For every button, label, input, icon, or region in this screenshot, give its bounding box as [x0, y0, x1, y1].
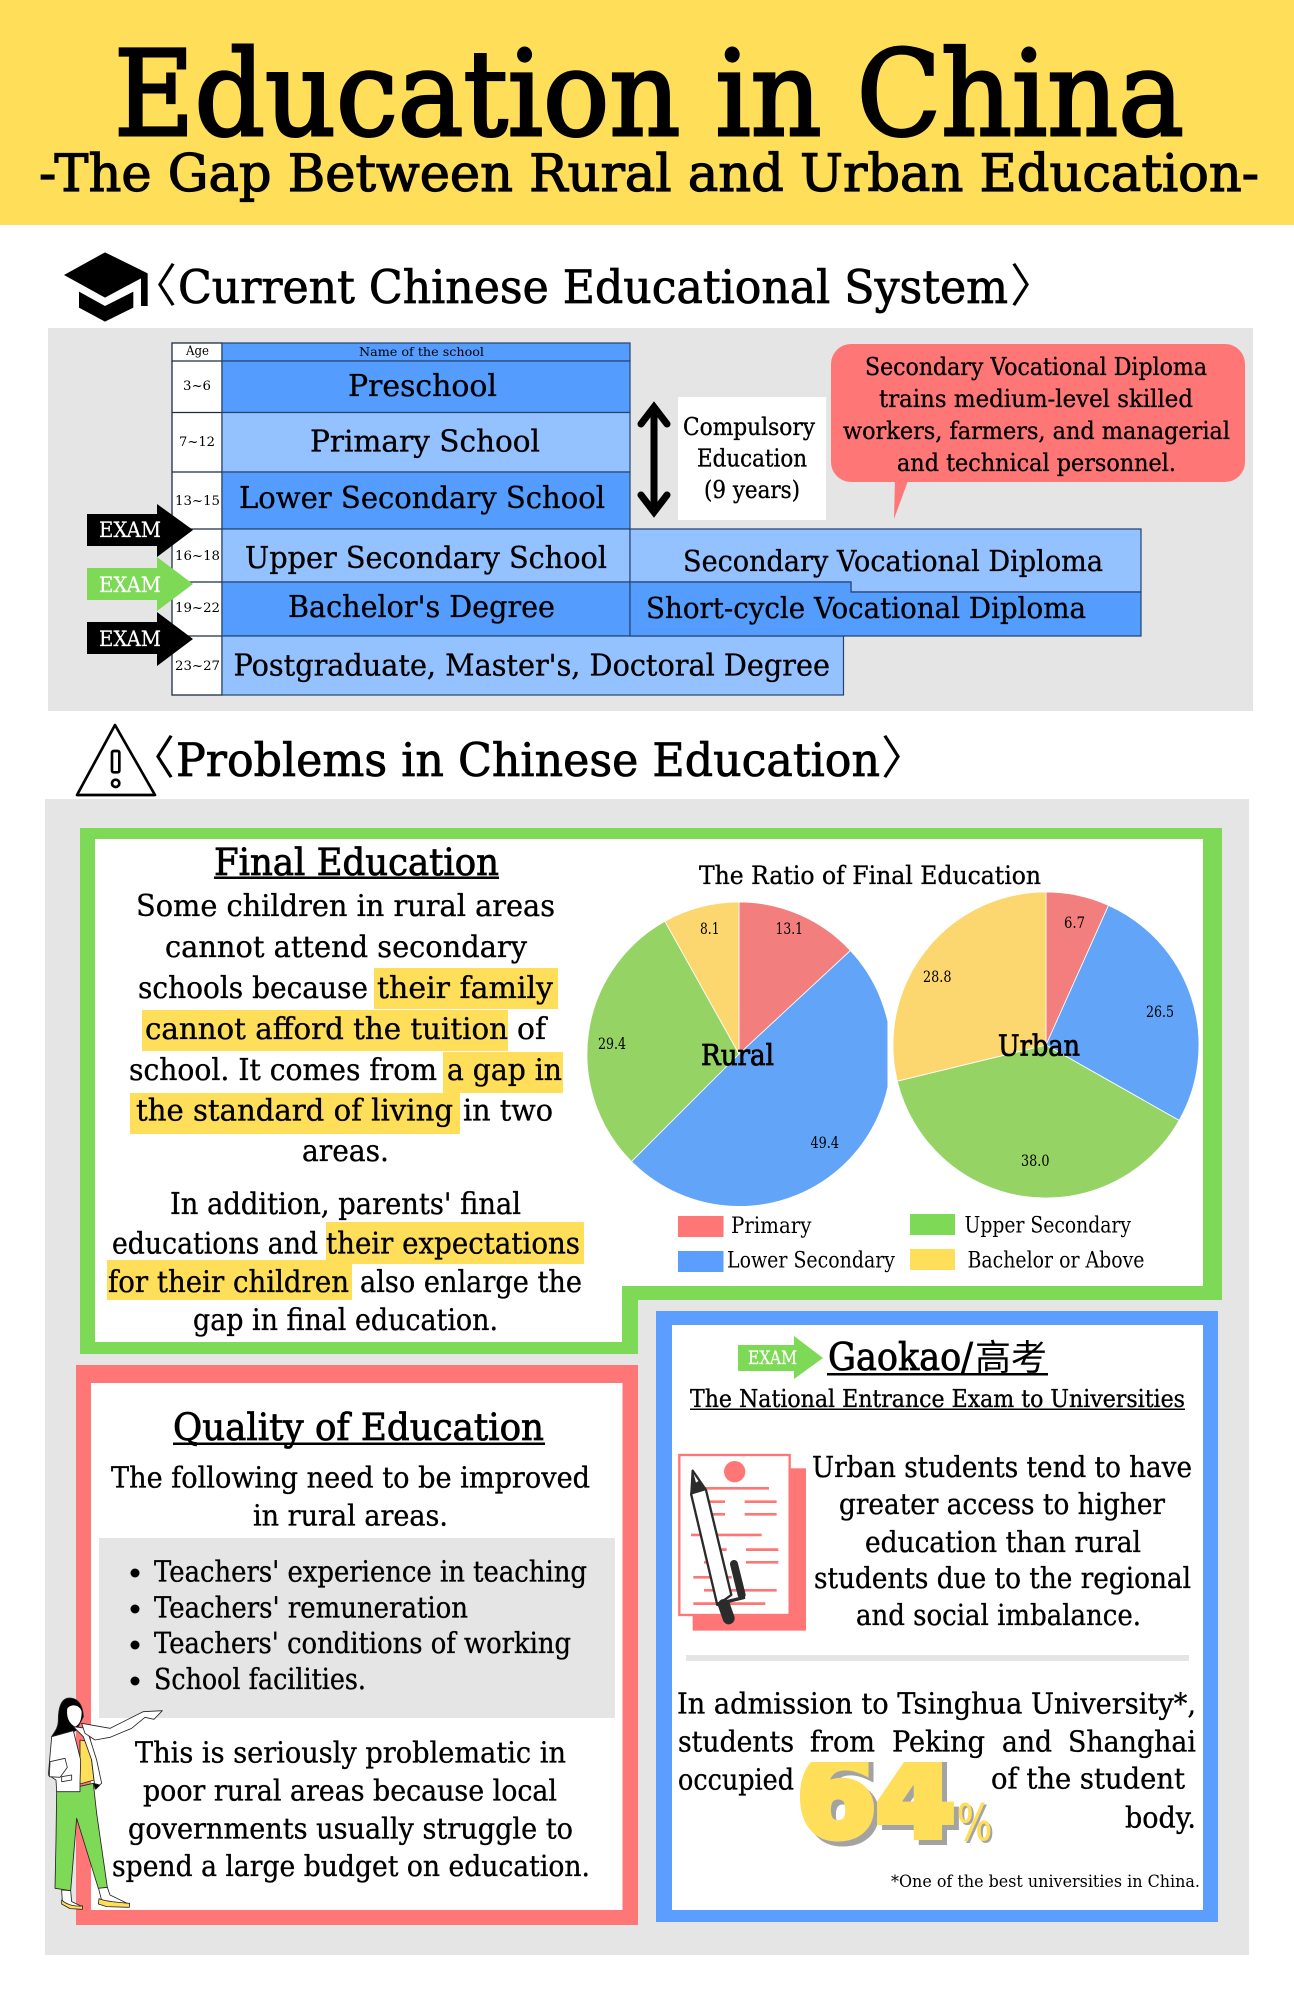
callout: vocational diploma: trains medium-level skilled — [879, 384, 1193, 413]
legend: Upper Secondary — [964, 1214, 1131, 1238]
heading: problems: 〈 — [129, 732, 175, 784]
heading: current system: Current Chinese Educational System — [178, 260, 1008, 314]
icon: warning triangle — [77, 725, 155, 795]
text: final education body: a gap in — [447, 1053, 562, 1088]
panel: gaokao — [656, 1311, 1218, 1922]
text: conclusion — [112, 1736, 590, 1883]
heading: quality of education: Quality of Education — [173, 1406, 544, 1449]
list box: School facilities. — [154, 1662, 366, 1696]
title: Education in China — [114, 25, 1184, 163]
table: age column: 16~18 — [175, 549, 220, 564]
text: conclusion: spend a large budget on education. — [112, 1849, 590, 1883]
table: school names: Lower Secondary School — [239, 481, 605, 516]
stat: 64 percent: 64 — [802, 1738, 960, 1868]
icon: exam paper and pencil — [679, 1455, 806, 1631]
text: final education body: the standard of living — [136, 1094, 453, 1128]
compulsory education label: Compulsory — [683, 413, 815, 441]
text: final education body: areas. — [302, 1134, 389, 1169]
list box — [99, 1538, 615, 1718]
callout: vocational diploma: Secondary Vocational Diploma — [865, 352, 1207, 381]
exam arrow: gaokao: EXAM — [748, 1347, 797, 1369]
panel: problems background — [45, 799, 1249, 1955]
list box: Teachers' remuneration — [154, 1590, 468, 1624]
pie chart: urban: Urban — [998, 1029, 1080, 1063]
panel: educational system — [48, 328, 1253, 711]
pie chart: rural — [587, 902, 891, 1206]
text: tsinghua admission: In admission to Tsinghua University*, — [677, 1686, 1196, 1720]
table: age column: 23~27 — [175, 659, 220, 674]
text: final education body: their family — [377, 971, 553, 1006]
pie chart: urban — [893, 892, 1199, 1198]
icon: graduation cap — [64, 252, 148, 322]
text: final education body: school. It comes from — [129, 1053, 437, 1088]
heading: problems: Problems in Chinese Education — [176, 733, 880, 787]
exam arrow: black 1 — [87, 504, 193, 557]
footnote: *One of the best universities in China. — [891, 1872, 1200, 1892]
heading: problems: 〉 — [881, 732, 927, 784]
callout: vocational diploma — [831, 344, 1245, 519]
exam arrow: gaokao — [738, 1336, 823, 1379]
text: final education body — [108, 889, 582, 1338]
table: age column: 7~12 — [179, 435, 215, 450]
text: final education body: Some children in rural areas — [136, 889, 555, 924]
compulsory education label: Education — [697, 444, 807, 472]
text: urban access — [812, 1450, 1192, 1632]
exam arrow: black 1: EXAM — [99, 518, 161, 542]
table: school names: Postgraduate, Master's, Doctoral Degree — [234, 648, 830, 684]
exam arrow: green — [87, 557, 193, 611]
heading: current system: 〉 — [1010, 260, 1056, 312]
text: final education body: cannot attend secondary — [165, 930, 527, 965]
text: intro: in rural areas. — [253, 1498, 448, 1532]
pie chart: rural: 13.1 — [776, 919, 803, 938]
pie chart: rural: 29.4 — [598, 1034, 626, 1053]
table: school names: Primary School — [310, 424, 540, 460]
text: urban access: greater access to higher — [839, 1487, 1165, 1521]
table: school names — [234, 344, 1103, 684]
text: final education body: educations and — [112, 1226, 318, 1262]
panel: final education — [80, 828, 1222, 1354]
text: final education body: in two — [463, 1094, 553, 1128]
stat: 64 percent: % — [959, 1796, 994, 1854]
table: school names: Preschool — [348, 369, 497, 404]
exam arrow: black 2: EXAM — [99, 627, 161, 651]
table: age column: 19~22 — [175, 601, 220, 616]
table: school names: Name of the school — [359, 344, 484, 359]
table: school names: Secondary Vocational Diploma — [683, 544, 1103, 578]
table: school names: Short-cycle Vocational Diploma — [646, 591, 1086, 625]
pie chart: urban: 26.5 — [1146, 1002, 1174, 1021]
heading: current system: 〈 — [131, 260, 177, 312]
chart title: The Ratio of Final Education — [699, 861, 1041, 890]
table: school rows — [222, 343, 1141, 695]
compulsory education label: (9 years) — [704, 476, 800, 504]
callout: vocational diploma: workers, farmers, and managerial — [843, 416, 1230, 445]
text: final education body: of — [517, 1012, 548, 1047]
table: age column — [172, 343, 222, 695]
table: school names: Bachelor's Degree — [288, 590, 555, 625]
text: conclusion: This is seriously problematic in — [135, 1736, 566, 1770]
table: age column: 13~15 — [175, 494, 220, 509]
text: conclusion: governments usually struggle to — [128, 1812, 573, 1846]
text: intro: The following need to be improved — [111, 1460, 590, 1494]
pie chart: rural: Rural — [701, 1038, 774, 1072]
text: final education body: schools because — [138, 971, 368, 1006]
legend: Primary — [731, 1214, 812, 1239]
pie chart: urban: 6.7 — [1064, 913, 1085, 932]
text: final education body: also enlarge the — [360, 1265, 582, 1300]
table: age column: 3~6 — [183, 379, 211, 394]
text: tsinghua admission: occupied — [678, 1762, 794, 1796]
panel: quality of education — [76, 1365, 638, 1925]
text: tsinghua admission: body. — [1125, 1800, 1196, 1834]
text: tsinghua admission: Peking — [892, 1724, 985, 1758]
legend: Bachelor or Above — [968, 1248, 1144, 1274]
table: age column: Age — [185, 344, 209, 359]
header banner — [0, 0, 1294, 225]
list box: Teachers' conditions of working — [154, 1626, 571, 1660]
arrow: compulsory range — [641, 407, 667, 512]
legend: Lower Secondary — [727, 1248, 895, 1274]
text: final education body: cannot afford the tuition — [145, 1012, 508, 1047]
text: intro — [111, 1460, 590, 1532]
heading: final education: Final Education — [214, 841, 499, 884]
pie chart: rural: 8.1 — [700, 919, 720, 938]
text: tsinghua admission: and — [1002, 1724, 1052, 1758]
text: final education body: their expectations — [326, 1226, 580, 1262]
heading: gaokao: Gaokao/ — [828, 1335, 973, 1379]
stat: 64 percent: 64 — [797, 1733, 955, 1863]
pie chart: rural: 49.4 — [810, 1133, 839, 1152]
text: urban access: Urban students tend to have — [812, 1450, 1192, 1484]
pie chart: urban: 28.8 — [923, 967, 952, 986]
subtitle: -The Gap Between Rural and Urban Education- — [39, 145, 1259, 204]
compulsory education label — [678, 397, 826, 520]
text: urban access: education than rural — [865, 1525, 1141, 1559]
text: urban access: students due to the regional — [814, 1561, 1191, 1595]
heading: gaokao: 高考 — [975, 1337, 1047, 1378]
stat: 64 percent: % — [957, 1794, 992, 1852]
text: conclusion: poor rural areas because local — [143, 1774, 557, 1808]
subheading: national exam: The National Entrance Exam to Universities — [690, 1385, 1185, 1413]
text: final education body: gap in final education. — [193, 1303, 498, 1338]
callout: vocational diploma: and technical personnel. — [897, 448, 1176, 477]
table: school names: Upper Secondary School — [245, 541, 607, 576]
pie chart: urban: 38.0 — [1021, 1151, 1050, 1170]
exam arrow: black 2 — [87, 612, 193, 666]
divider — [686, 1655, 1189, 1661]
text: urban access: and social imbalance. — [856, 1598, 1141, 1632]
text: final education body: In addition, parents' final — [170, 1187, 521, 1222]
text: final education body: for their children — [108, 1265, 349, 1300]
legend — [678, 1214, 1144, 1274]
text: tsinghua admission: of the student — [991, 1762, 1185, 1796]
stat: 64 percent — [800, 1762, 992, 1846]
figure: woman pointing — [48, 1698, 162, 1909]
text: tsinghua admission: Shanghai — [1068, 1724, 1196, 1758]
highlights — [107, 968, 584, 1300]
text: tsinghua admission: students — [678, 1724, 794, 1758]
text: tsinghua admission — [677, 1686, 1196, 1834]
text: tsinghua admission: from — [810, 1724, 875, 1758]
exam arrow: green: EXAM — [99, 573, 161, 597]
list box: Teachers' experience in teaching — [154, 1554, 587, 1588]
